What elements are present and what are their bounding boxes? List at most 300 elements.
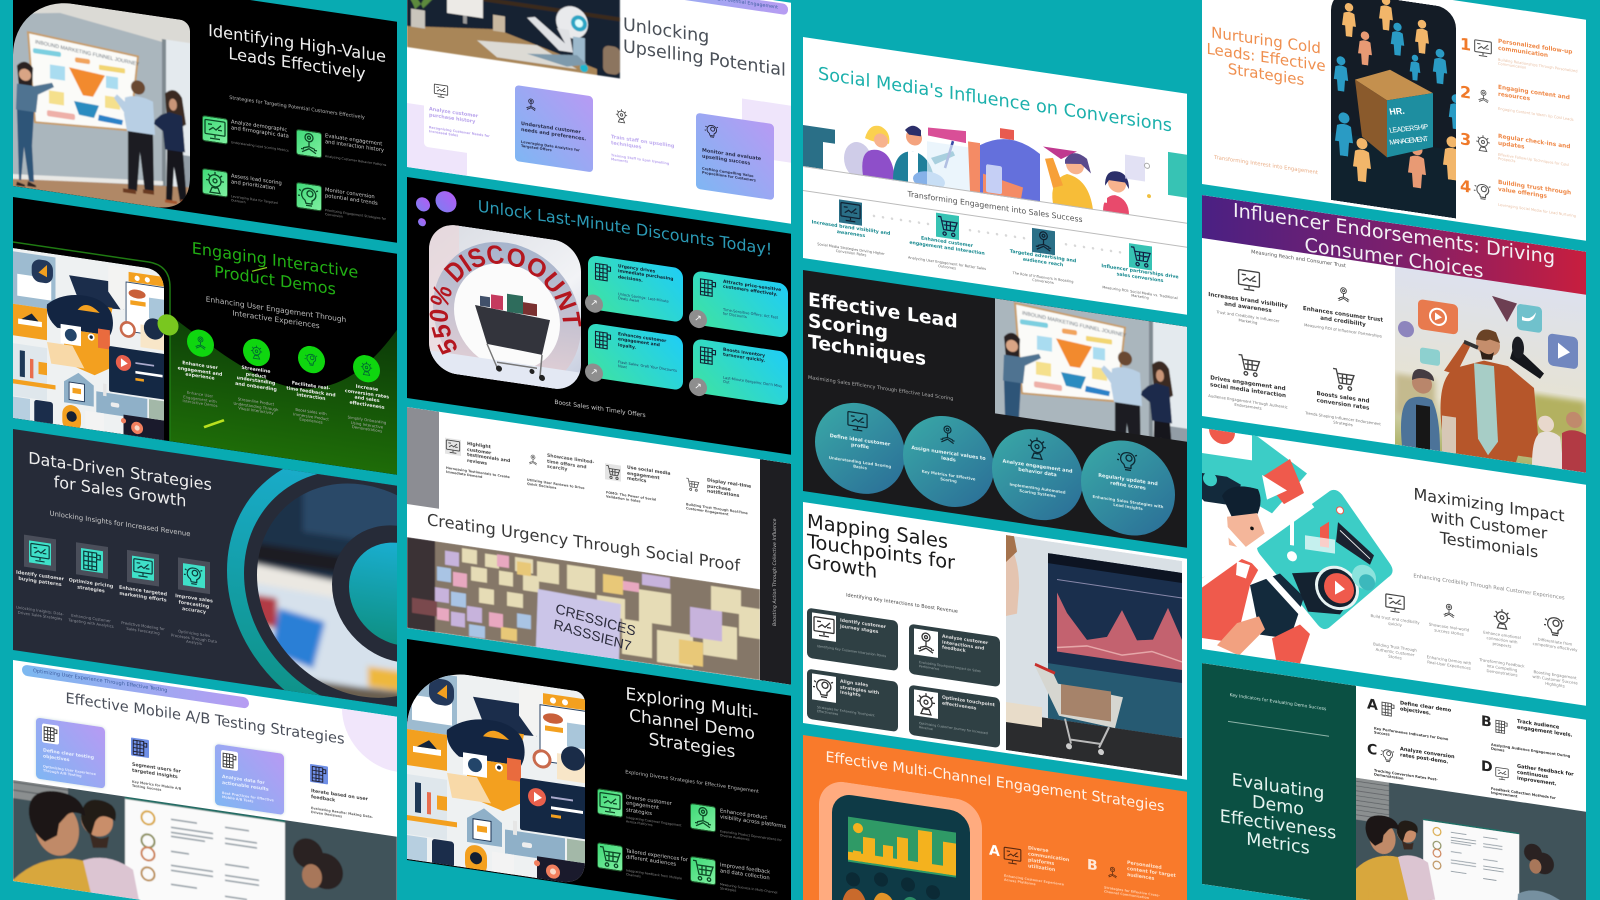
item heading: conversion rates <box>345 389 389 400</box>
header band with title <box>1202 195 1586 295</box>
card 4: Boosts inventory <box>723 348 765 359</box>
card 2: customers effectively. <box>723 285 778 298</box>
item heading: Improved feedback and data collection <box>720 862 770 882</box>
card 1: Optimizing User Experience Through A/B Testing <box>43 764 96 778</box>
item note: Transforming Feedback into Compelling Demonstrations <box>1479 657 1525 677</box>
slide: Engaging Interactive Product Demos <box>13 197 397 475</box>
title: Engaging Interactive Product Demos <box>192 238 358 299</box>
card 3: Flash Sales: Grab Your Discounts Now! <box>618 360 677 373</box>
subtitle: Key Indicators for Evaluating Demo Success <box>1230 693 1326 712</box>
card 4 gradient: Monitor and evaluate upselling success <box>702 148 761 167</box>
item note: Measuring Success in Multi-Channel Strategies <box>720 882 777 895</box>
item heading: Targeted advertising and audience reach <box>1010 250 1076 268</box>
item note: Strategies for Effective Cross-Channel Communication <box>1104 885 1160 900</box>
header band with title: Influencer Endorsements: Driving <box>1233 199 1555 269</box>
letter D: D <box>1481 758 1493 776</box>
item heading: Influencer partnerships drive sales conversions <box>1101 264 1179 284</box>
card 4: Optimize touchpoint effectiveness <box>942 696 995 711</box>
circle 1 <box>815 397 905 500</box>
slide: Mapping Sales Touchpoints <box>803 502 1187 780</box>
number 3: 3 <box>1460 129 1471 150</box>
item heading <box>235 366 277 393</box>
title <box>1202 767 1354 865</box>
illustration: video creator <box>1202 428 1393 664</box>
circle 4 <box>1081 434 1175 542</box>
item note: Integrating Feedback from Multiple Channels <box>626 868 682 881</box>
subtitle: Enhancing Credibility Through Real Customer Experiences <box>1413 573 1565 602</box>
title <box>623 15 786 80</box>
icon 1 <box>445 438 461 456</box>
photo: team at funnel board <box>13 3 190 208</box>
icon C <box>1380 746 1396 765</box>
tagline pill: Optimizing User Experience Through Effective Testing <box>33 668 167 694</box>
circle 1: Define ideal customer profile <box>830 433 890 451</box>
icon 3 <box>1491 606 1513 633</box>
icon 4 <box>690 856 716 886</box>
photo: cube and figures: LEADERSHIP <box>1389 124 1430 135</box>
slide: Identifying High-Value Leads <box>13 0 397 243</box>
item note: Boosting Engagement with Customer Success Highlights <box>1532 669 1578 688</box>
item heading: Increased brand visibility and awareness <box>812 220 890 239</box>
item heading: effectiveness <box>349 401 385 411</box>
icon 2 <box>529 454 537 466</box>
icon A <box>1004 846 1022 865</box>
item heading: Building trust through value offerings <box>1498 180 1571 200</box>
subtitle: Maximizing Sales Efficiency Through Effective Lead Scoring <box>808 375 953 402</box>
dark side column <box>760 459 792 685</box>
title <box>1413 484 1565 562</box>
icon: conversion <box>296 182 322 212</box>
slide: Unlocking Upselling Potential <box>407 0 791 224</box>
card 3 <box>807 669 898 732</box>
card 3 white <box>605 95 681 184</box>
item note: Enhancing Customer Targeting with Analytics <box>68 613 114 628</box>
item heading: interaction <box>296 393 326 403</box>
icon D <box>1494 765 1510 782</box>
photo: robot at desk <box>407 0 621 80</box>
card 2 gradient: Leveraging Data Analytics for Targeted Offers <box>521 140 580 153</box>
card 1: Urgency drives <box>618 264 655 275</box>
card 2 gradient: Understand customer needs and preferences. <box>521 121 586 142</box>
title: Identifying High-Value Leads Effectively <box>208 21 386 83</box>
dots connector <box>968 228 1026 240</box>
item heading: Diverse customer engagement strategies <box>626 794 672 817</box>
item heading: Boosts sales and conversion rates <box>1316 391 1370 412</box>
icon frame 3 <box>127 550 159 587</box>
card 1: Identify customer journey stages <box>840 618 886 635</box>
photo: influencer with megaphone <box>1395 266 1586 473</box>
title: Demo <box>1252 792 1304 820</box>
card 3: loyalty. <box>618 343 636 351</box>
title: Effectiveness <box>1220 807 1336 844</box>
item note: Enhance User Engagement with Interactive Demos <box>183 390 217 408</box>
card 4 gradient: Crafting Compelling Value Propositions for Customers <box>702 167 756 183</box>
icon 1 <box>1238 269 1260 292</box>
card 3: Strategies for Enhancing Touchpoint Effectiveness <box>817 705 875 718</box>
decorative lilac circle <box>342 654 452 780</box>
item heading: Drives engagement and social media interaction <box>1210 375 1286 399</box>
item heading: Enhanced product visibility across platforms <box>720 808 786 830</box>
icon: analyze <box>202 115 228 145</box>
item note: Boost Sales with Immersive Product Experiences <box>293 407 329 425</box>
slide: Exploring Multi-Channel Demo Strategies <box>407 639 791 900</box>
card 2: Time-Sensitive Offers: Act Fast for Discounts <box>723 308 778 320</box>
item heading: Improve sales forecasting accuracy <box>175 594 213 615</box>
slide: Influencer Endorsements <box>1202 195 1586 473</box>
item note: Expanding Product Demonstrations for Diverse Audiences <box>720 829 782 842</box>
arrow badge 3 <box>585 362 603 383</box>
item heading <box>286 380 336 403</box>
card 4: turnover quickly. <box>723 353 765 364</box>
letter B: B <box>1087 857 1098 875</box>
item heading <box>345 384 389 411</box>
item note: Evaluating Results: Making Data-Driven Decisions <box>311 806 373 819</box>
icon A <box>1380 699 1396 719</box>
subtitle: Strategies for Targeting Potential Customers Effectively <box>229 95 365 121</box>
item heading: Showcase limited-time offers and scarcity <box>547 454 594 473</box>
card 2: Analyze customer interactions and feedback <box>942 635 988 654</box>
letter A: A <box>989 842 1000 860</box>
subtitle: Identifying Key Interactions to Boost Revenue <box>846 592 958 615</box>
item note: Tracking Conversion Rates Post-Demonstration <box>1374 768 1438 782</box>
item note: Feedback Collection Methods for Improvement <box>1491 787 1556 800</box>
item heading: Iterate based on user feedback <box>311 789 368 803</box>
item note: Predictive Modeling for Sales Forecasting <box>121 620 165 635</box>
subtitle between rules <box>803 166 1187 248</box>
title: Nurturing Cold Leads: Effective Strategies <box>1206 23 1326 89</box>
photo: cube and figures <box>1331 0 1456 218</box>
item note: Building Relationships Through Personalized Communication <box>1498 58 1578 73</box>
item heading: time feedback and <box>286 386 336 398</box>
item note: Measuring ROI of Influencer Partnerships <box>1304 322 1382 339</box>
header band with title: Consumer Choices <box>1305 233 1483 282</box>
arrow badge 1 <box>585 293 603 314</box>
item heading: product <box>246 372 266 380</box>
title: Effective Mobile A/B Testing Strategies <box>65 691 345 748</box>
item heading: Regular check-ins and updates <box>1498 134 1570 151</box>
title: with Customer <box>1431 507 1547 543</box>
card 4: Optimizing Customer Journey for Increased Revenue <box>919 721 988 735</box>
illustration: flat collage <box>13 241 268 442</box>
letter C: C <box>1367 741 1377 759</box>
icon 2 <box>131 737 149 758</box>
card 1 <box>36 717 105 789</box>
title: Evaluating <box>1232 770 1324 804</box>
title: Touchpoints for <box>807 530 955 575</box>
card 2 gradient <box>515 85 593 172</box>
subtitle: Measuring Reach and Consumer Trust <box>1251 249 1346 269</box>
item heading: Analyze demographic and firmographic data <box>231 119 289 140</box>
arrow badge 4: ↗ <box>694 381 702 393</box>
card 4 gradient <box>696 113 774 200</box>
divider line <box>1228 721 1329 737</box>
icon 2 <box>1478 90 1488 104</box>
card 3: Analyze data for actionable results <box>222 775 269 792</box>
icon 4 <box>1333 368 1355 392</box>
item heading: Define clear demo objectives. <box>1400 700 1451 717</box>
icon 3 <box>1032 228 1055 255</box>
card 2 <box>909 624 1000 687</box>
photo: presentation chart <box>819 782 982 900</box>
photo: team at funnel board <box>995 298 1187 442</box>
circle 3 <box>992 423 1083 526</box>
item heading: Gather feedback for continuous improvement. <box>1517 764 1574 788</box>
item note: Analyzing User Engagement for Better Sales Outcomes <box>908 256 986 271</box>
title: Social Media's Influence on Conversions <box>818 64 1172 136</box>
icon 4 <box>1129 243 1152 271</box>
slide: Evaluating Demo Effectiveness <box>1202 663 1586 900</box>
item note: Understanding Lead Scoring Metrics <box>231 140 289 153</box>
icon frame 1 <box>24 535 56 571</box>
item note: FOMO: The Power of Social Validation in Sales <box>606 490 656 503</box>
item heading: Facilitate real- <box>292 381 330 392</box>
arrow badge 4 <box>689 377 707 397</box>
item note: Measuring ROI: Social Media vs. Traditional Marketing <box>1102 285 1178 300</box>
subtitle between rules: Transforming Engagement into Sales Success <box>907 189 1083 224</box>
subtitle: Enhancing User Engagement Through Interactive Experiences <box>206 294 346 330</box>
card 3: Best Practices for Effective Mobile A/B Tests <box>222 791 274 804</box>
title: Growth <box>807 550 877 583</box>
title: Exploring Multi-Channel Demo Strategies <box>625 684 759 762</box>
item heading: Evaluate engagement and interaction history <box>325 133 384 154</box>
icon 1 <box>839 199 862 226</box>
card 4: Last-Minute Bargains: Don't Miss Out <box>723 376 782 388</box>
card 1: decisions. <box>618 275 643 284</box>
dots connector <box>1064 243 1122 254</box>
arrow badge 2: ↗ <box>694 313 702 325</box>
item note: Building Trust Through Authentic Customer Stories <box>1373 641 1417 660</box>
item note: Integrating Customer Engagement Across Platforms <box>626 815 681 828</box>
item note: Building Trust Through Real-Time Customer Engagement <box>686 502 748 516</box>
item heading: Monitor conversion potential and trends <box>325 187 378 207</box>
card 1 white: Analyze customer purchase history <box>429 106 478 125</box>
photo: sticky note wall: CRESSICES <box>555 600 637 639</box>
card 3: Align sales strategies with insights <box>840 679 879 699</box>
card 1: immediate purchasing <box>618 270 673 283</box>
item heading: Tailored experiences for different audiences <box>626 848 688 868</box>
slide: Effective Multi-Channel Engagement <box>803 735 1187 900</box>
item heading: understanding <box>237 376 275 387</box>
title: Testimonials <box>1440 528 1538 562</box>
item note: Leveraging Social Media for Lead Nurturing <box>1498 203 1576 218</box>
item note: Streamline Product Understanding Through Visual Interactivity <box>234 396 278 416</box>
icon 1 <box>597 788 623 818</box>
letter A: A <box>1367 696 1378 714</box>
item note: Analyzing Audience Engagement During Demos <box>1491 743 1570 758</box>
item heading: Enhanced customer engagement and interaction <box>909 236 985 257</box>
lilac decorations <box>407 98 791 176</box>
item heading: Identify customer buying patterns <box>16 570 64 588</box>
slide: Effective Lead Scoring Techniques <box>803 270 1187 548</box>
arrow badge 3: ↗ <box>590 367 598 378</box>
card 3 <box>215 744 284 815</box>
card 3 white: Train staff on upselling techniques <box>611 134 674 151</box>
title: Effective Lead Scoring Techniques <box>808 290 958 370</box>
icon 3 <box>597 842 623 872</box>
icon circle 1 <box>187 330 214 357</box>
icon 2 <box>1338 287 1350 302</box>
icon 3 <box>605 463 621 482</box>
card 2: Evaluating Touchpoint Impact on Sales Performance <box>919 660 981 673</box>
icon 2 <box>690 803 716 833</box>
item heading: Streamline <box>242 366 270 375</box>
icon 1 <box>1474 39 1492 58</box>
letter B: B <box>1481 713 1492 731</box>
icon 4 <box>310 764 328 785</box>
item heading: Assess lead scoring and prioritization <box>231 173 282 192</box>
item heading: experience <box>185 373 215 382</box>
card 4 <box>693 338 788 406</box>
item heading <box>178 360 222 382</box>
card 3 <box>588 323 683 391</box>
circle 2: Assign numerical values to leads <box>911 445 986 464</box>
subtitle: Unlocking Insights for Increased Revenue <box>50 509 190 538</box>
slide: Creating Urgency Through Social Proof <box>407 407 791 685</box>
photo: cube and figures: HR. <box>1388 106 1406 117</box>
green background curve <box>170 320 397 475</box>
item heading: and sales <box>354 396 380 405</box>
item heading: Diverse communication platforms utilization <box>1028 846 1069 873</box>
item note: Key Performance Indicators for Demo Success <box>1374 726 1448 741</box>
icon 2 <box>936 213 959 240</box>
footer text: Boost Sales with Timely Offers <box>554 399 646 419</box>
item heading: Optimize pricing strategies <box>69 578 113 594</box>
slide: Maximizing Impact with Testimonials <box>1202 428 1586 706</box>
card 2: Attracts price-sensitive <box>723 280 781 293</box>
item heading: Differentiate from competitors effectively <box>1533 637 1577 652</box>
circle 3: Analyze engagement and behavior data <box>1003 458 1072 478</box>
green side panel <box>1202 663 1356 900</box>
circular photo with teal rings <box>227 469 397 707</box>
item heading: Personalized content for target audiences <box>1127 861 1176 882</box>
item note: Enhancing Demos with Real-User Experiences <box>1427 654 1471 670</box>
title: Metrics <box>1246 830 1310 859</box>
item heading: Analyze conversion rates post-demo. <box>1400 746 1455 765</box>
item heading: Increases brand visibility and awareness <box>1208 292 1288 314</box>
item note: Trust and Credibility in Influencer Marketing <box>1217 309 1279 325</box>
subtitle: Exploring Diverse Strategies for Effective Engagement <box>625 769 759 795</box>
icon circle 4 <box>353 355 380 382</box>
icon circle 3 <box>298 346 325 374</box>
icon 4 <box>1543 612 1567 640</box>
icon 4 <box>1474 184 1491 200</box>
icon B <box>1108 866 1117 878</box>
item note: Audience Engagement Through Authentic Endorsements <box>1208 393 1288 410</box>
item heading: Showcase real-world success stories <box>1429 622 1469 636</box>
item heading: and onboarding <box>235 382 277 393</box>
photo: meeting <box>1356 778 1586 900</box>
item note: Analyzing Customer Behavior Patterns <box>325 154 386 167</box>
icon frame 2 <box>76 542 108 579</box>
photo: sticky note wall: RASSSIEN7 <box>553 616 633 654</box>
circle 2 <box>903 410 994 513</box>
item heading: Enhances consumer trust and credibility <box>1303 306 1383 328</box>
circle 2: Key Metrics for Effective Scoring <box>922 469 975 483</box>
title <box>806 510 955 583</box>
item note: Harnessing Testimonials to Create Immediate Demand <box>446 466 510 479</box>
item heading: Personalized follow-up communication <box>1498 39 1572 59</box>
icon 4 <box>686 478 700 492</box>
card 3 white: Training Staff to Spot Upselling Moments <box>611 153 669 166</box>
card 1 white: Recognizing Customer Needs for Increased Sales <box>429 125 490 138</box>
icon 3 <box>1476 135 1490 152</box>
item note: Optimizing Sales Processes Through Data Analysis <box>171 628 217 646</box>
circle 3: Implementing Automated Scoring Systems <box>1009 481 1066 498</box>
number 4: 4 <box>1460 176 1471 197</box>
item note: Enhancing Customer Experience Across Platforms <box>1004 874 1064 887</box>
item note: Prioritizing Engagement Strategies for Conversion <box>325 208 386 221</box>
item heading: Increase <box>356 385 378 393</box>
item heading: Build trust and credibility quickly <box>1370 613 1420 627</box>
vertical caption: Boosting Action Through Collective Influence <box>773 518 778 627</box>
card 1: Define clear testing objectives <box>43 748 94 763</box>
card 2 <box>693 270 788 338</box>
item heading: Use social media engagement metrics <box>627 465 671 485</box>
item note: Utilizing User Reviews to Drive Quick Decisions <box>527 478 585 490</box>
title: Effective Multi-Channel Engagement Strategies <box>825 749 1164 815</box>
item note: Simplify Onboarding Using Interactive Demonstrations <box>348 414 386 434</box>
slide: Nurturing Cold Leads <box>1202 0 1586 241</box>
illustration: social media people <box>803 125 1187 215</box>
item note: The Role of Influencers in Boosting Conversions <box>1013 271 1073 285</box>
card 1 <box>588 255 683 323</box>
title: Data-Driven Strategies for Sales Growth <box>28 448 212 511</box>
slide: Social Media's Influence on Conversions <box>803 37 1187 315</box>
dots connector <box>872 214 930 226</box>
item heading: Enhance targeted marketing efforts <box>119 586 167 604</box>
title: Maximizing Impact <box>1413 484 1565 526</box>
photo: meeting <box>13 780 397 900</box>
circle 4: Enhancing Sales Strategies with Lead Insights <box>1093 494 1163 511</box>
item heading: Enhance emotional connection with prospects <box>1483 630 1521 648</box>
icon B <box>1494 718 1509 735</box>
icon: engagement <box>296 129 322 159</box>
tagline pill <box>567 0 788 15</box>
item note: Unlocking Insights: Data-Driven Sales Strategies <box>16 604 64 621</box>
slide: Last-Minute Discounts <box>407 177 791 455</box>
circle 1: Understanding Lead Scoring Basics <box>829 455 891 470</box>
photo: cube and figures: MANAGEMENT <box>1389 136 1430 147</box>
item note: Trends Shaping Influencer Endorsement Strategies <box>1305 410 1381 427</box>
icon circle 2 <box>243 338 270 366</box>
item heading: Segment users for targeted insights <box>132 763 181 780</box>
title: Creating Urgency Through Social Proof <box>427 510 740 575</box>
card 1 white <box>424 69 498 157</box>
purple dots <box>416 191 456 226</box>
item note: Effective Follow-Up Techniques for Cold Prospects <box>1498 153 1569 167</box>
item heading: Engaging content and resources <box>1498 85 1570 103</box>
tagline pill <box>22 664 249 709</box>
title: Unlock Last-Minute Discounts Today! <box>478 196 772 259</box>
photo: analytics monitor and cart <box>1006 535 1182 776</box>
card 1: Unlock Savings: Last-Minute Deals Await <box>618 292 669 304</box>
icon 1 <box>1385 593 1405 613</box>
title: Unlocking <box>623 15 709 48</box>
item heading: engagement and <box>178 366 222 378</box>
illustration: flat collage <box>407 674 585 882</box>
item note: Leveraging Data for Targeted Outreach <box>231 194 278 205</box>
photo: sticky note wall <box>407 537 760 680</box>
icon frame 4 <box>178 557 210 594</box>
item heading: Display real-time purchase notifications <box>707 478 751 499</box>
number 1: 1 <box>1460 34 1471 55</box>
number 2: 2 <box>1460 82 1471 103</box>
slide: Effective Mobile A/B Testing <box>13 660 397 900</box>
gray block <box>407 407 439 509</box>
item note: Engaging Content to Warm Up Cold Leads <box>1498 107 1573 122</box>
icon 3 <box>1238 354 1260 378</box>
title: Upselling Potential <box>623 36 786 80</box>
